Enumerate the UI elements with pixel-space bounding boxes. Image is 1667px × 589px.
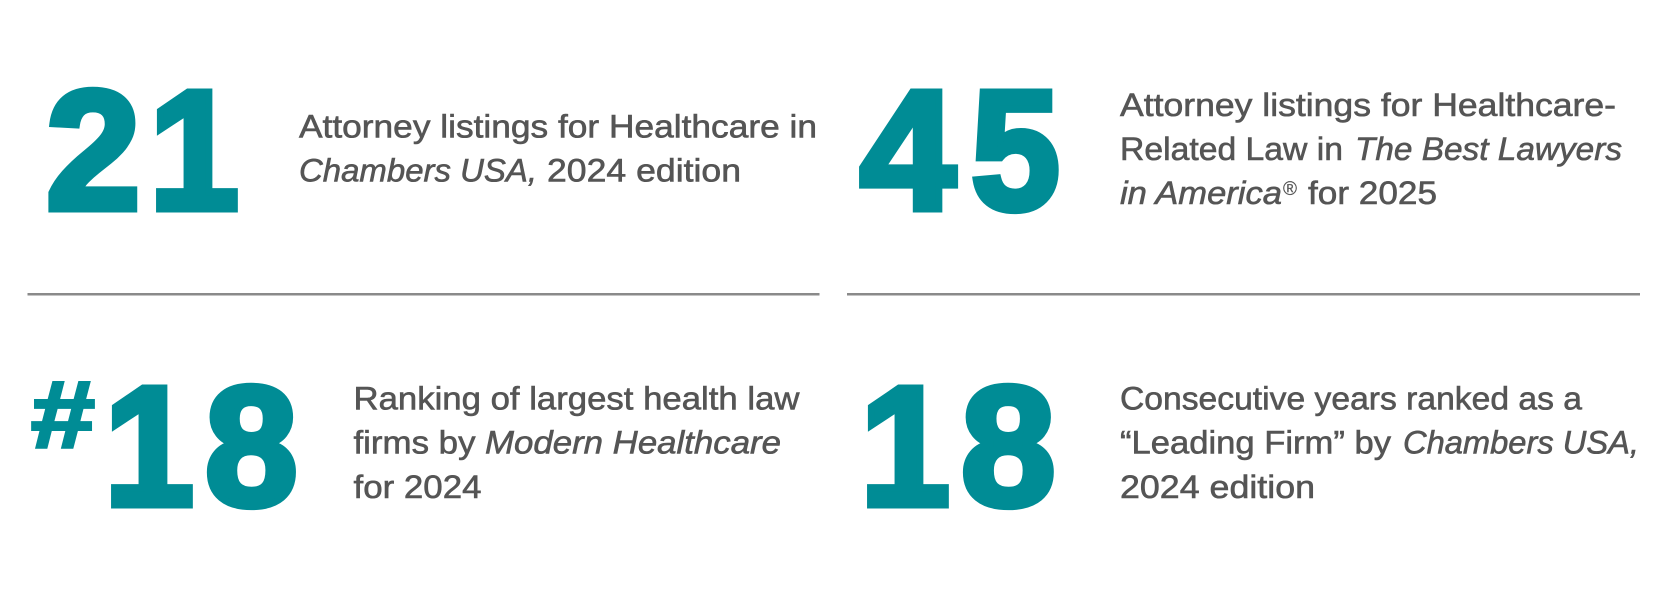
big number 45: 5 <box>971 55 1060 245</box>
big number #18: 8 <box>205 351 298 541</box>
description: #18 <box>354 380 800 505</box>
description: 18 <box>1120 380 1639 505</box>
big number 21 <box>46 56 239 246</box>
description: 45: in America <box>1120 175 1282 211</box>
description: 45: Attorney listings for Healthcare- <box>1120 87 1616 123</box>
divider right <box>847 293 1640 296</box>
big number #18: # <box>31 362 95 468</box>
panel: 18 consecutive years <box>860 352 1639 542</box>
divider left <box>28 293 820 296</box>
description: 21: Chambers USA, <box>299 152 537 188</box>
big number #18 <box>31 351 298 542</box>
description: 18: “Leading Firm” by <box>1120 424 1391 460</box>
description: 45 <box>1120 87 1622 211</box>
description: 18: 2024 edition <box>1120 469 1315 505</box>
big number 18: 1 <box>860 352 950 542</box>
description: 18: Consecutive years ranked as a <box>1120 380 1582 416</box>
big number #18: 1 <box>104 352 194 542</box>
description: 45: Related Law in <box>1120 131 1343 167</box>
description: 18: Chambers USA, <box>1403 424 1639 460</box>
big number 18 <box>860 352 1056 542</box>
panel: #18 ranking <box>31 351 800 542</box>
description: #18: for 2024 <box>354 469 482 505</box>
panel: 45 attorney listings <box>860 55 1622 246</box>
description: #18: Modern Healthcare <box>485 424 781 460</box>
description: 45: for 2025 <box>1308 175 1437 211</box>
big number 18: 8 <box>961 352 1056 542</box>
big number 45 <box>860 55 1060 246</box>
panel: 21 attorney listings <box>46 56 817 246</box>
description: 21: Attorney listings for Healthcare in <box>299 108 817 144</box>
big number 45: 4 <box>860 56 955 246</box>
description: 21: 2024 edition <box>547 152 741 188</box>
description: 45: The Best Lawyers <box>1355 131 1622 167</box>
description: #18: Ranking of largest health law <box>354 380 800 416</box>
description: 45: ® <box>1283 179 1297 200</box>
big number 21: 2 <box>46 56 141 246</box>
description: 21 <box>299 108 817 188</box>
description: #18: firms by <box>354 424 476 460</box>
big number 21: 1 <box>149 56 239 246</box>
